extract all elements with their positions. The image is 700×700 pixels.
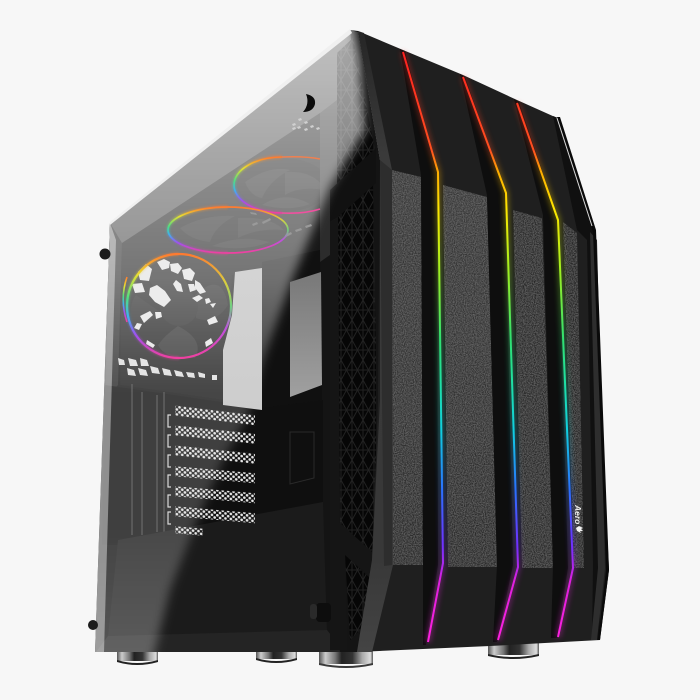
grey interior plate: [290, 272, 322, 397]
fan honeycomb openings: [132, 259, 218, 348]
product illustration: computer case: [88, 30, 609, 668]
left frame strip: [105, 223, 122, 400]
rear fan body: [126, 253, 232, 359]
strip 1: [403, 52, 443, 642]
front panel base: [357, 31, 609, 652]
top grille holes: [250, 118, 320, 237]
textured panels: [392, 170, 584, 568]
light interior plate: [223, 268, 262, 410]
ring: rear fan: [123, 254, 231, 358]
glass reflection: [95, 30, 372, 652]
power supply shroud: [108, 502, 327, 636]
RGB light strip glow: [403, 52, 573, 642]
middle fan: [169, 208, 287, 252]
brand logo: Aero: [573, 504, 583, 524]
side panel: interior behind glass: [95, 30, 380, 652]
front mesh intake: [330, 38, 376, 650]
bottom strip: [96, 630, 340, 652]
central post: [262, 250, 322, 408]
RGB light strips: [403, 52, 573, 642]
case feet: [117, 642, 539, 668]
bezel strip: [357, 31, 393, 652]
expansion slot grilles: [175, 405, 255, 536]
top fan: [169, 158, 329, 252]
thumb screws: [88, 94, 331, 630]
right highlight: [557, 118, 592, 226]
strip 3: [517, 103, 573, 637]
brand logo: [573, 504, 583, 533]
top frame: [110, 30, 352, 243]
panel grooves: [400, 49, 600, 645]
right side band: [590, 232, 605, 640]
ring: top fan: [234, 157, 320, 213]
fan RGB rings: [123, 157, 320, 358]
rear slot lines: [132, 384, 171, 535]
right cable cut-out: [290, 432, 314, 484]
ring: middle fan: [168, 207, 288, 253]
glass top highlight: [110, 29, 352, 225]
front panel: [357, 31, 609, 652]
glass left edge: [95, 223, 116, 652]
vertical frame strip: [320, 55, 337, 262]
lower fan grille: [118, 358, 217, 380]
interior upper fan bay: [120, 113, 320, 400]
strip 2: [463, 77, 518, 640]
motherboard tray lower: [102, 385, 323, 545]
